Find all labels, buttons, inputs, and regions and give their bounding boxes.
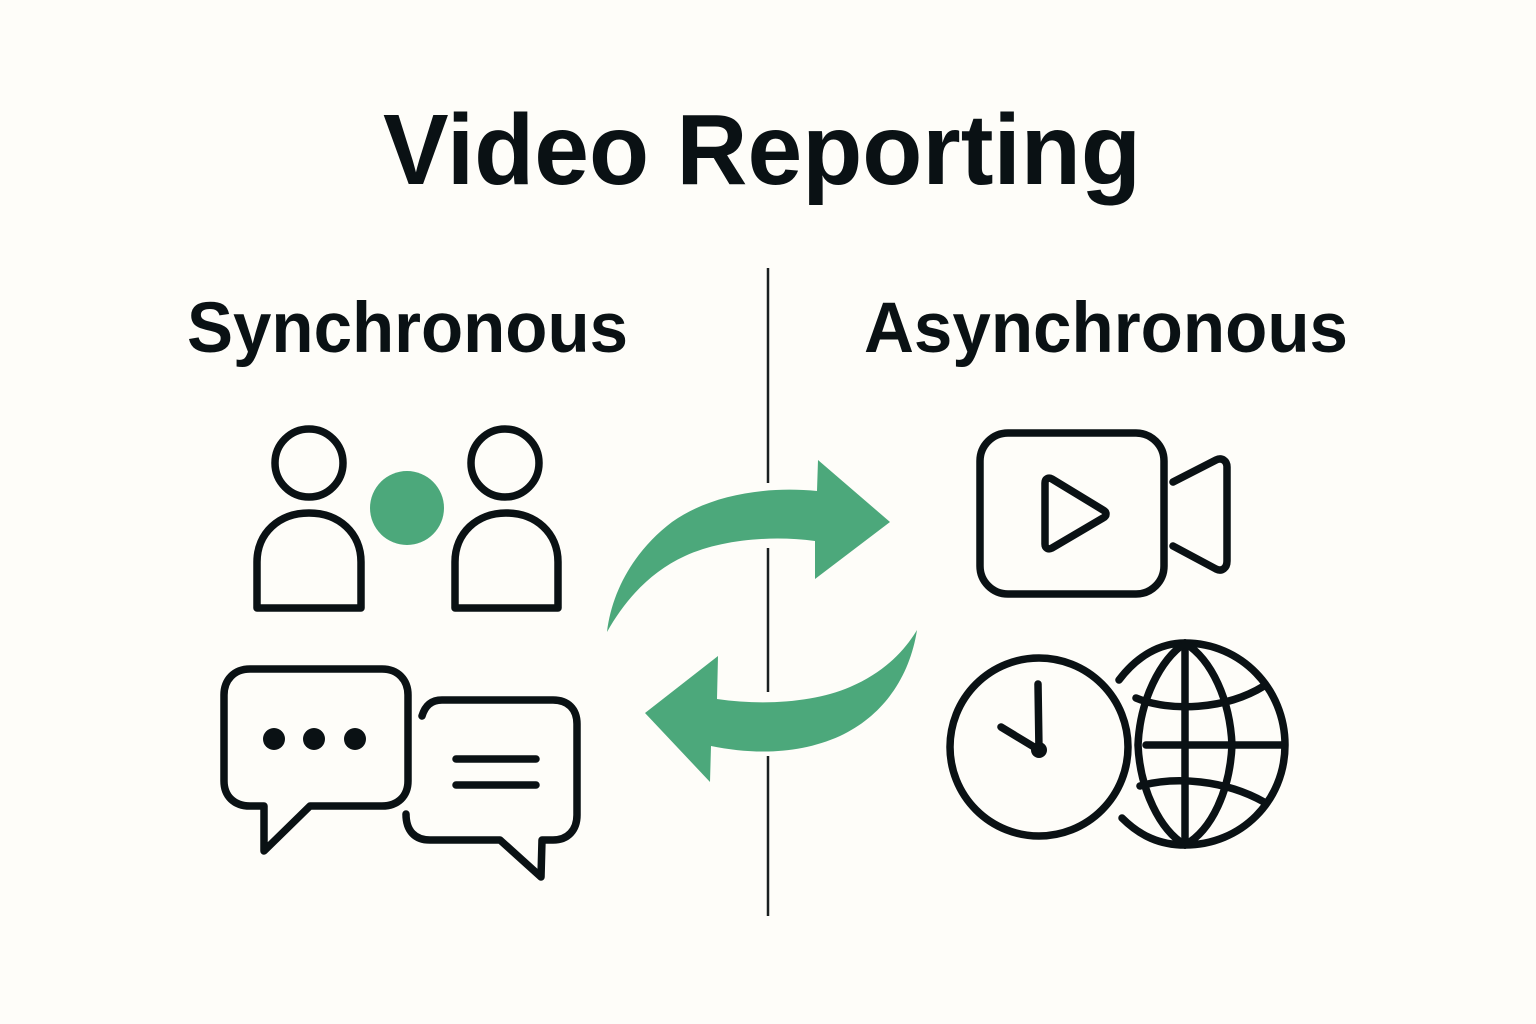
center divider [767, 268, 769, 916]
icon: globe [1119, 643, 1285, 845]
heading: synchronous: Synchronous [187, 289, 628, 368]
icon: video camera with play button [980, 433, 1227, 594]
arrow: top green arrow pointing right [607, 460, 890, 632]
title: Video Reporting [383, 94, 1141, 206]
icon: two people with green dot [257, 429, 558, 608]
icon: clock [950, 658, 1128, 836]
arrow: bottom green arrow pointing left [645, 630, 917, 782]
heading: asynchronous: Asynchronous [864, 289, 1348, 368]
icon: chat bubbles [224, 669, 577, 877]
